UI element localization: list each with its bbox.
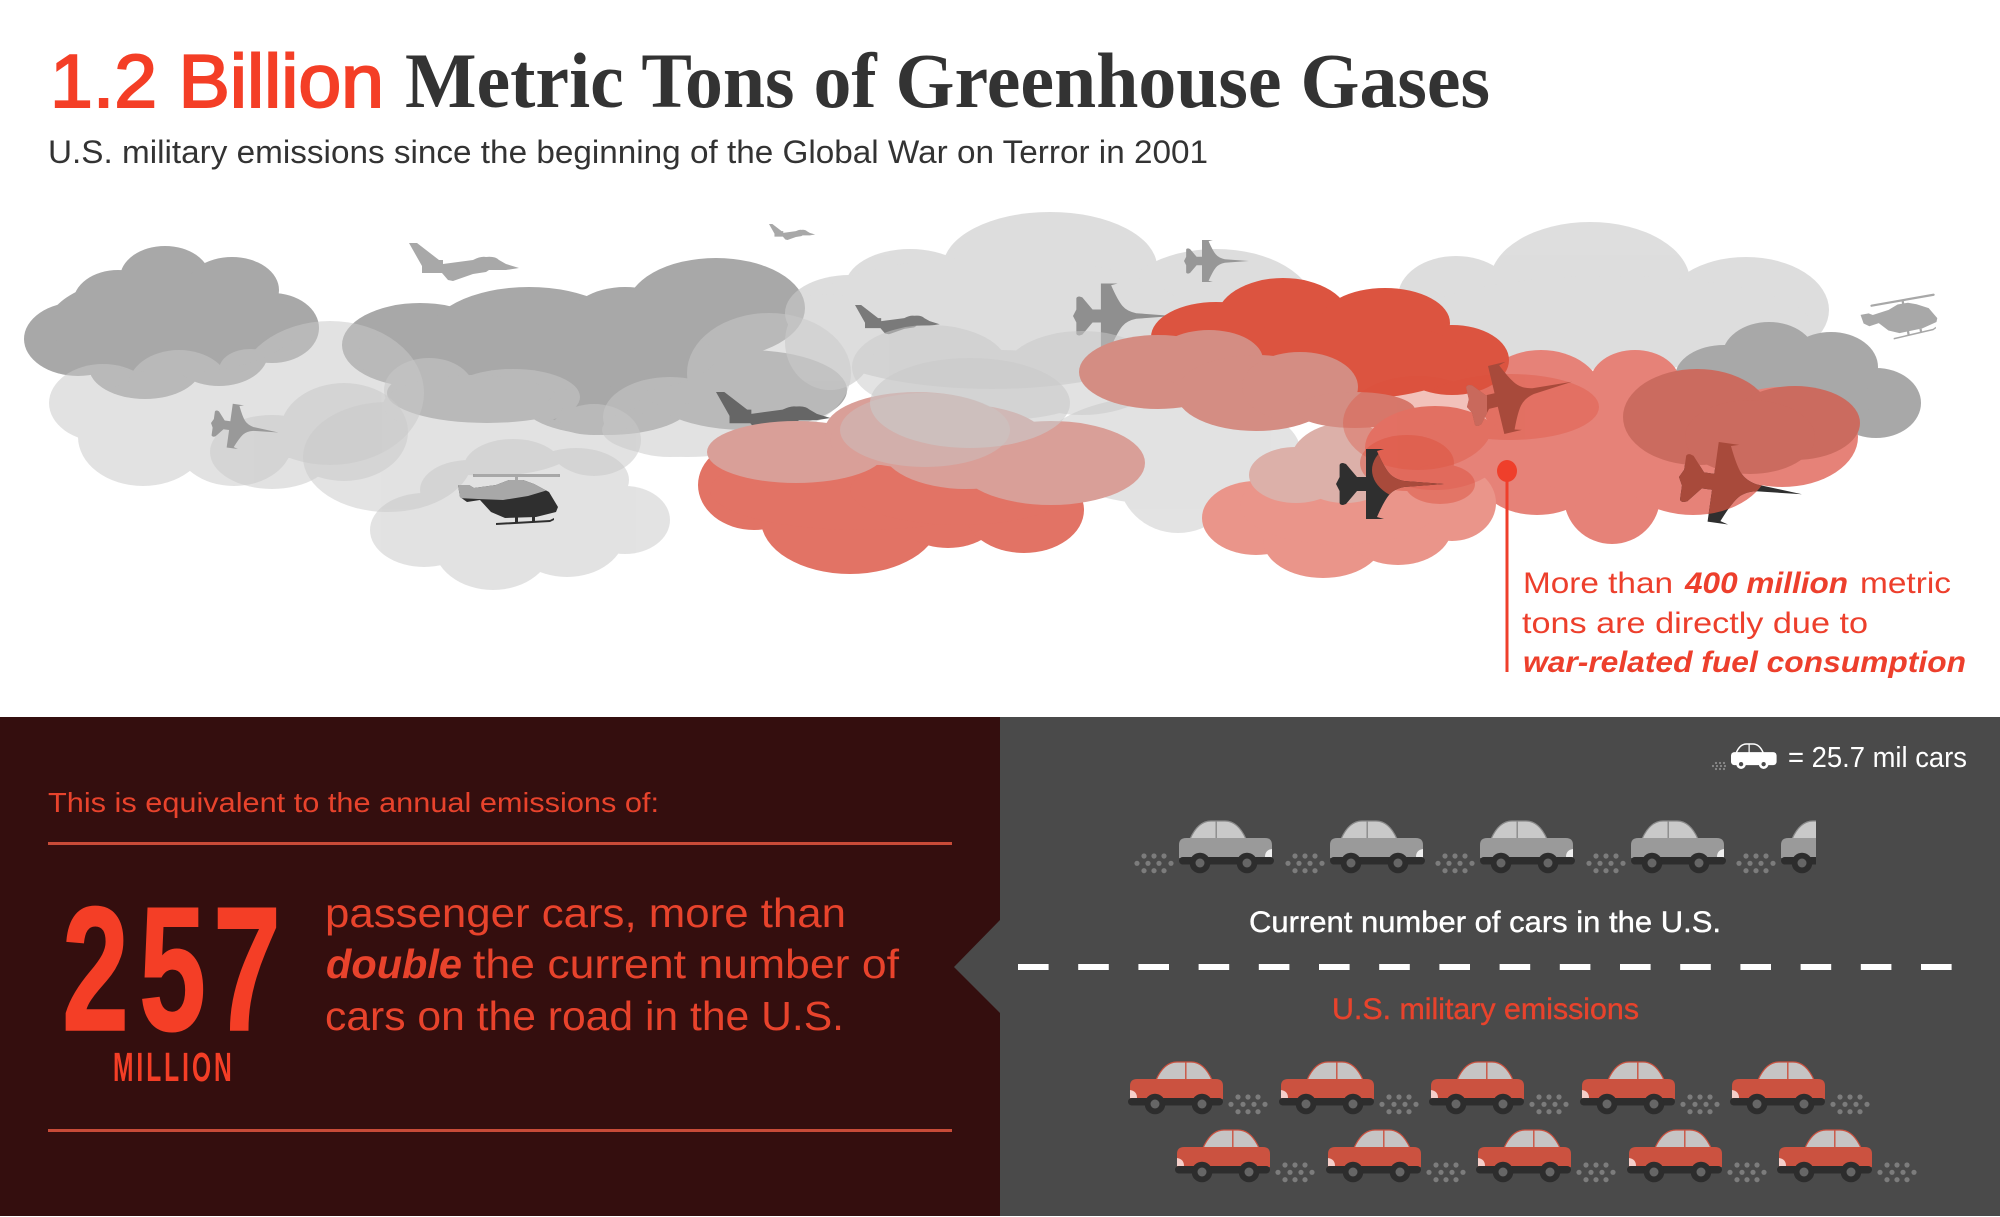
panel: cars comparison — [954, 717, 2000, 1216]
paragraph: passenger cars, more than — [325, 890, 846, 936]
light cloud helicopter — [370, 439, 670, 590]
icon: fighter top — [1184, 240, 1249, 282]
grey cars row — [1134, 821, 1876, 873]
callout text — [1522, 567, 1966, 679]
title highlight: 1.2 Billion — [50, 39, 384, 123]
icon: jet center — [855, 305, 940, 334]
callout: war related fuel — [1497, 460, 1966, 679]
title serif: Metric Tons of Greenhouse Gases — [405, 37, 1490, 124]
light cloud left — [49, 321, 424, 486]
callout text: More than — [1523, 567, 1673, 600]
dark grey cloud right — [1675, 322, 1921, 445]
icon: fighter upper red — [1466, 362, 1572, 434]
salmon cloud right — [1479, 350, 1858, 544]
icon: fighter dark — [1336, 449, 1444, 519]
light cloud left inner — [210, 383, 408, 489]
translucent red lobe — [1360, 435, 1475, 504]
icon: helicopter right — [1859, 293, 1941, 344]
pale pink cloud — [1249, 423, 1400, 503]
icon: jet lower — [716, 392, 830, 432]
callout text: tons are directly due to — [1522, 607, 1868, 640]
callout text: war-related fuel consumption — [1523, 646, 1966, 679]
label: military emissions: U.S. military emissions — [1332, 993, 1639, 1026]
icon: jet small top left — [409, 243, 519, 281]
icon: fighter right red — [1679, 442, 1762, 514]
light cloud top center — [785, 212, 1314, 390]
darker salmon cloud — [1623, 369, 1860, 474]
salmon base behind band — [1365, 406, 1505, 490]
arrow notch — [954, 920, 1000, 1013]
translucent red band — [1343, 374, 1599, 470]
legend — [1712, 742, 1967, 774]
red cars rows — [1128, 1062, 1917, 1182]
million label: MILLION — [113, 1045, 232, 1091]
icon: fighter left — [208, 401, 281, 454]
pale cloud over red — [707, 392, 1145, 505]
big number: 7 — [213, 870, 281, 1068]
callout text: metric — [1860, 567, 1951, 600]
paragraph: cars on the road in the U.S. — [325, 993, 844, 1039]
icon: fighter center — [1073, 283, 1173, 349]
paragraph: double — [326, 941, 462, 987]
subtitle: U.S. military emissions since the beginning of the Global War on Terror in 2001 — [48, 134, 1208, 170]
big number: 2 — [62, 870, 129, 1068]
red cloud lower — [698, 440, 1084, 574]
callout marker — [1497, 460, 1517, 672]
icon: jet tiny top — [769, 224, 815, 240]
light cloud top right — [1398, 222, 1829, 370]
callout text: 400 million — [1684, 567, 1848, 600]
panel: equivalent — [0, 717, 1000, 1216]
pale salmon cloud — [1202, 465, 1496, 578]
dark grey clouds — [24, 246, 847, 435]
grey cloud over pale upper — [870, 358, 1070, 448]
paragraph — [325, 890, 900, 1039]
light grey cloud center — [852, 325, 1160, 420]
big number: 5 — [139, 870, 206, 1068]
big number — [62, 870, 281, 1068]
light cloud middle — [602, 313, 851, 457]
paragraph: the current number of — [473, 941, 900, 987]
grey cloud over pale lower — [840, 393, 1010, 467]
icon: fighter dark base — [1673, 437, 1808, 534]
dark red cloud — [1151, 278, 1509, 400]
legend: = 25.7 mil cars — [1788, 742, 1967, 774]
light cloud center bottom filler — [1040, 395, 1300, 533]
icon: helicopter — [458, 474, 560, 525]
label: current cars: Current number of cars in the U.S. — [1249, 906, 1721, 939]
light cloud left overlapping dark — [303, 358, 641, 512]
lead-in text: This is equivalent to the annual emissions of: — [48, 787, 659, 818]
pink cloud over dark red — [1079, 330, 1415, 431]
title — [50, 37, 1490, 124]
cloud illustration — [24, 212, 1941, 590]
